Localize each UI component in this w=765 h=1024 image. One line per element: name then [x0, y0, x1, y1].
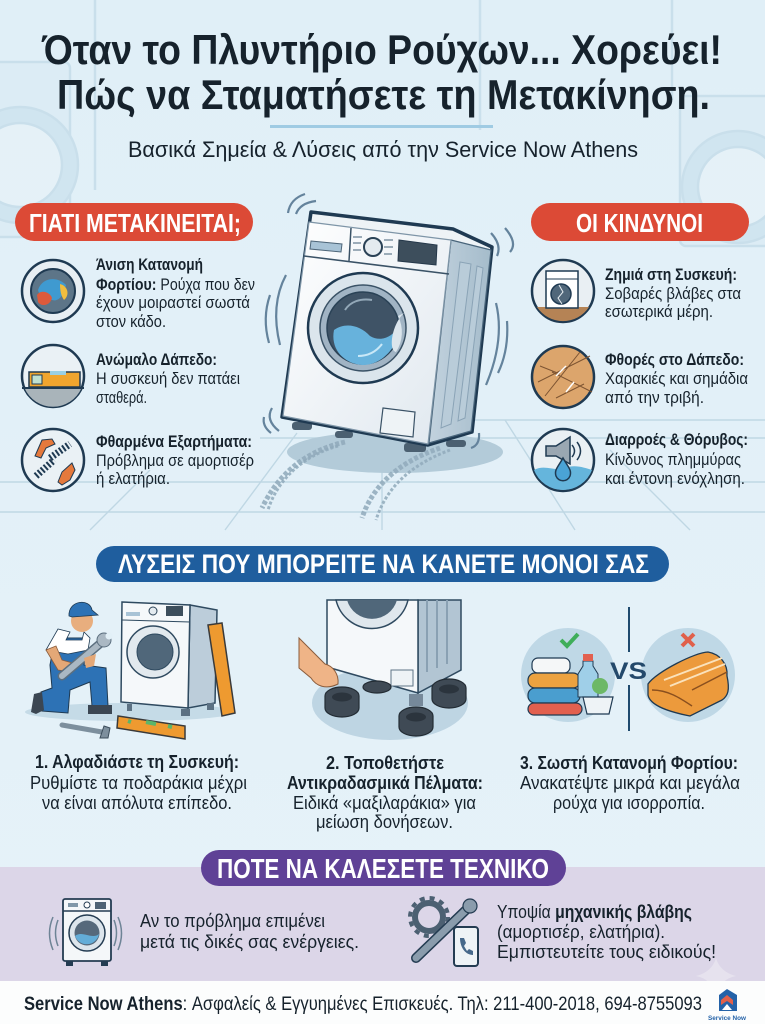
text: appliance damage: εσωτερικά μέρη. — [605, 302, 713, 321]
text: step 1: 1. Αλφαδιάστε τη Συσκευή: — [35, 752, 239, 772]
door — [308, 273, 418, 383]
heading: dangers: ΟΙ ΚΙΝΔΥΝΟΙ — [576, 208, 703, 238]
icon: shaking washer — [50, 899, 122, 966]
panel background — [0, 867, 765, 981]
text: floor wear — [605, 350, 748, 407]
icon: scratched floor — [532, 346, 594, 408]
skid marks — [262, 442, 440, 518]
icon: leak and noise — [532, 429, 594, 491]
vibration arcs — [264, 194, 513, 448]
service hatch — [380, 408, 415, 437]
panel: step 3 load distribution — [520, 607, 740, 813]
text: step 2: μείωση δονήσεων. — [316, 812, 453, 832]
towel stack — [532, 658, 570, 673]
floor shadow — [287, 431, 503, 473]
floor level — [117, 716, 185, 739]
text: mechanical fault: (αμορτισέρ, ελατήρια). — [497, 922, 665, 942]
faint background washers — [0, 0, 765, 246]
floor tiles — [0, 420, 765, 530]
text: step 3: 3. Σωστή Κατανομή Φορτίου: — [520, 753, 738, 773]
panel: why it moves — [15, 203, 255, 491]
technician — [41, 638, 108, 713]
subtitle: Βασικά Σημεία & Λύσεις από την Service Now Athens — [128, 137, 638, 162]
cross mark — [682, 634, 694, 646]
check mark — [561, 634, 578, 646]
panel: dangers — [531, 203, 749, 491]
illustration: mixed load versus single bulky item — [521, 607, 735, 731]
illustration: shaking washing machine — [262, 194, 513, 520]
text: uneven load: έχουν μοιραστεί σωστά — [96, 293, 250, 312]
title — [41, 26, 722, 118]
icon: damaged appliance — [532, 260, 594, 322]
text: step 1 — [30, 752, 247, 813]
text: mechanical fault: Υποψία μηχανικής βλάβης — [497, 902, 692, 922]
section heading: DIY solutions: ΛΥΣΕΙΣ ΠΟΥ ΜΠΟΡΕΙΤΕ ΝΑ ΚΑΝΕΤΕ ΜΟΝΟΙ ΣΑΣ — [118, 549, 649, 579]
front — [283, 222, 451, 444]
title underline — [270, 125, 493, 128]
feet — [292, 422, 466, 452]
logo — [708, 989, 747, 1022]
heading: why it moves — [15, 203, 253, 241]
text: worn parts: Φθαρμένα Εξαρτήματα: — [96, 432, 252, 451]
heading: dangers — [531, 203, 749, 241]
side — [429, 240, 491, 443]
body outline — [282, 212, 492, 445]
control panel — [304, 228, 449, 274]
text: uneven floor: Η συσκευή δεν πατάει — [96, 369, 240, 388]
panel: step 1 level the appliance — [25, 602, 247, 813]
panel: when to call a technician — [0, 850, 765, 981]
text: problem persists: Αν το πρόβλημα επιμένει — [140, 911, 325, 931]
text: mechanical fault: Εμπιστευτείτε τους ειδικούς! — [497, 942, 716, 962]
heading: call a technician: ΠΟΤΕ ΝΑ ΚΑΛΕΣΕΤΕ ΤΕΧΝΙΚΟ — [217, 853, 549, 884]
footer — [0, 981, 765, 1024]
icon: worn parts — [22, 429, 84, 491]
rubber pads — [325, 679, 466, 736]
floor wrench — [62, 725, 102, 732]
text: step 3: Ανακατέψτε μικρά και μεγάλα — [520, 773, 740, 793]
text: floor wear: από την τριβή. — [605, 388, 704, 407]
logo: Service Now — [708, 1015, 747, 1022]
text: uneven floor: σταθερά. — [96, 388, 147, 407]
text: step 2: 2. Τοποθετήστε — [326, 753, 444, 773]
text: appliance damage — [605, 265, 741, 321]
text: leaks and noise — [605, 430, 748, 488]
illustration: technician levelling washer — [25, 602, 235, 739]
text: uneven floor — [96, 350, 240, 407]
text: worn parts — [96, 432, 254, 488]
text: leaks and noise: και έντονη ενόχληση. — [605, 469, 745, 488]
text: step 1: Ρυθμίστε τα ποδαράκια μέχρι — [30, 773, 247, 793]
text: uneven load: Φορτίου: Ρούχα που δεν — [96, 275, 255, 294]
text: worn parts: ή ελατήρια. — [96, 469, 170, 488]
versus label: VS — [610, 658, 647, 685]
text: step 2: Ειδικά «μαξιλαράκια» για — [293, 793, 476, 813]
footer text: Service Now Athens: Ασφαλείς & Εγγυημένες Επισκευές. Τηλ: 211-400-2018, 694-8755093 — [24, 994, 702, 1015]
text: step 3: ρούχα για ισορροπία. — [553, 793, 705, 813]
text: appliance damage: Ζημιά στη Συσκευή: — [605, 265, 737, 284]
text: appliance damage: Σοβαρές βλάβες στα — [605, 284, 741, 303]
text: step 2 — [287, 753, 483, 832]
text: step 3 — [520, 753, 740, 813]
basket — [592, 678, 608, 694]
panel: step 2 anti-vibration pads — [287, 600, 483, 832]
text: uneven load: Άνιση Κατανομή — [96, 255, 203, 274]
heading: why it moves: ΓΙΑΤΙ ΜΕΤΑΚΙΝΕΙΤΑΙ; — [29, 208, 241, 238]
folded orange towel — [648, 652, 728, 716]
text: step 1: να είναι απόλυτα επίπεδο. — [42, 793, 232, 813]
text: uneven floor: Ανώμαλο Δάπεδο: — [96, 350, 217, 369]
sparkle — [696, 958, 736, 996]
standing level — [208, 623, 235, 716]
illustration: pads under washer — [299, 600, 468, 740]
text: mechanical fault — [497, 902, 716, 962]
icon: gear wrench and phone — [410, 898, 478, 966]
text: leaks and noise: Κίνδυνος πλημμύρας — [605, 450, 741, 469]
bottle — [578, 661, 598, 697]
text: step 2: Αντικραδασμικά Πέλματα: — [287, 773, 483, 793]
hand — [299, 638, 338, 687]
text: problem persists: μετά τις δικές σας ενέργειες. — [140, 932, 359, 952]
text: uneven load: στον κάδο. — [96, 312, 166, 331]
icon: unbalanced drum — [22, 260, 84, 322]
title: Πώς να Σταματήσετε τη Μετακίνηση. — [57, 71, 710, 118]
text: problem persists — [140, 911, 359, 952]
icon: spirit level — [22, 345, 84, 407]
text: floor wear: Χαρακιές και σημάδια — [605, 369, 748, 388]
text: worn parts: Πρόβλημα σε αμορτισέρ — [96, 451, 254, 470]
text: uneven load — [96, 255, 255, 331]
